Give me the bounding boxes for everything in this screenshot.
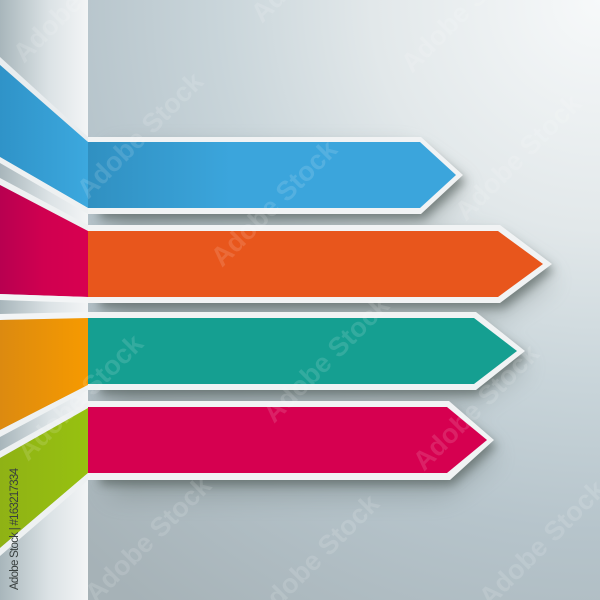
stock watermarks: Adobe Stock	[205, 134, 344, 272]
stock watermarks: Adobe Stock	[407, 338, 546, 476]
left panel: green	[0, 402, 88, 556]
left panel: crimson	[0, 178, 88, 303]
arrow 2: orange	[88, 225, 552, 303]
stock watermarks: Adobe Stock	[257, 290, 396, 428]
stock watermarks: Adobe Stock	[71, 66, 210, 204]
left panel: orange	[0, 312, 88, 437]
arrow 3: teal	[88, 312, 525, 390]
arrow 1: blue	[88, 137, 463, 214]
arrow shadows	[100, 146, 554, 495]
left panel: blue	[0, 57, 88, 214]
stock watermarks: Adobe Stock	[449, 88, 588, 226]
vertical stock id: Adobe Stock | #163217334	[9, 467, 21, 590]
left vertical strip	[0, 0, 88, 600]
stock watermarks: Adobe Stock	[11, 328, 150, 466]
arrow 4: crimson	[88, 401, 494, 480]
